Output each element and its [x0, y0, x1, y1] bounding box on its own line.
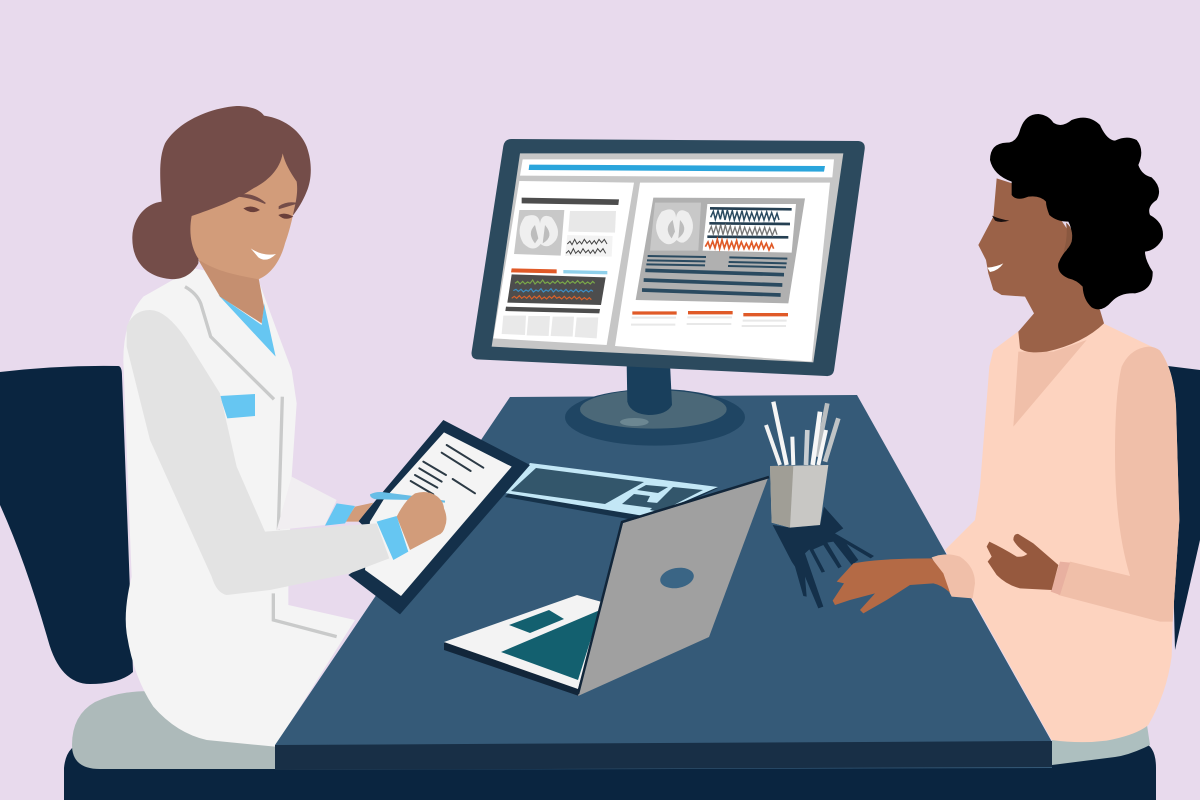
- near hand: [397, 492, 446, 550]
- monitor bezel: [472, 139, 865, 376]
- right report panel: [615, 183, 830, 362]
- patient's smile: [987, 263, 1003, 272]
- pen cup shadow: [773, 507, 874, 608]
- doctor's face: [190, 153, 297, 279]
- near sleeve: [127, 310, 389, 595]
- desk: [275, 395, 1052, 770]
- laptop lid: [578, 478, 768, 696]
- doctor's coat and sleeves: [123, 268, 355, 747]
- pen cup: [770, 465, 828, 528]
- screen header bar: [520, 159, 834, 177]
- patient's neck and face: [978, 178, 1104, 352]
- patient's collar shading: [1013, 340, 1087, 427]
- doctor's hair: [132, 106, 311, 279]
- laptop base: [444, 595, 602, 696]
- doctor's head: [132, 106, 311, 323]
- doctor's seat cushion: [72, 691, 285, 769]
- patient's ear: [1063, 223, 1072, 253]
- coat lapel lines: [185, 287, 337, 637]
- scrub top: [218, 295, 276, 357]
- patient's resting hand: [987, 534, 1058, 590]
- patient's body: [833, 323, 1179, 742]
- patient's eye: [992, 216, 1009, 222]
- pen cup group: [766, 402, 874, 608]
- patient's hair: [990, 114, 1163, 309]
- doctor's eyes: [243, 207, 293, 219]
- coat body: [123, 268, 355, 747]
- near cuff: [377, 516, 408, 560]
- coat name badge: [220, 394, 255, 418]
- patient's seat cushion: [1052, 725, 1150, 765]
- patient's chair back: [1168, 366, 1200, 650]
- laptop: [444, 477, 769, 696]
- far hand: [345, 503, 373, 522]
- monitor screen: [492, 153, 843, 362]
- doctor's arms: [127, 310, 446, 595]
- monitor stand base: [565, 363, 745, 446]
- left report panel: [493, 181, 634, 345]
- doctor's chair back: [0, 366, 133, 684]
- patient's near sleeve cuff: [932, 554, 975, 598]
- far sleeve: [277, 477, 337, 530]
- pens: [766, 402, 838, 465]
- doctor's eyebrows: [237, 195, 296, 208]
- patient's head and hair: [978, 114, 1163, 352]
- patient's hand on desk: [833, 558, 950, 613]
- laptop logo: [659, 565, 695, 591]
- doctor's smile: [251, 248, 276, 260]
- clipboard: [348, 420, 530, 614]
- far cuff: [325, 503, 355, 526]
- pen: [370, 492, 445, 503]
- keyboard: [505, 463, 718, 522]
- chair seat base: [64, 742, 1156, 800]
- patient's wrist cuff: [1051, 562, 1070, 595]
- patient's torso: [945, 323, 1179, 742]
- monitor: [472, 139, 865, 446]
- doctor's neck: [198, 260, 264, 323]
- patient's sleeve shading: [1058, 347, 1179, 622]
